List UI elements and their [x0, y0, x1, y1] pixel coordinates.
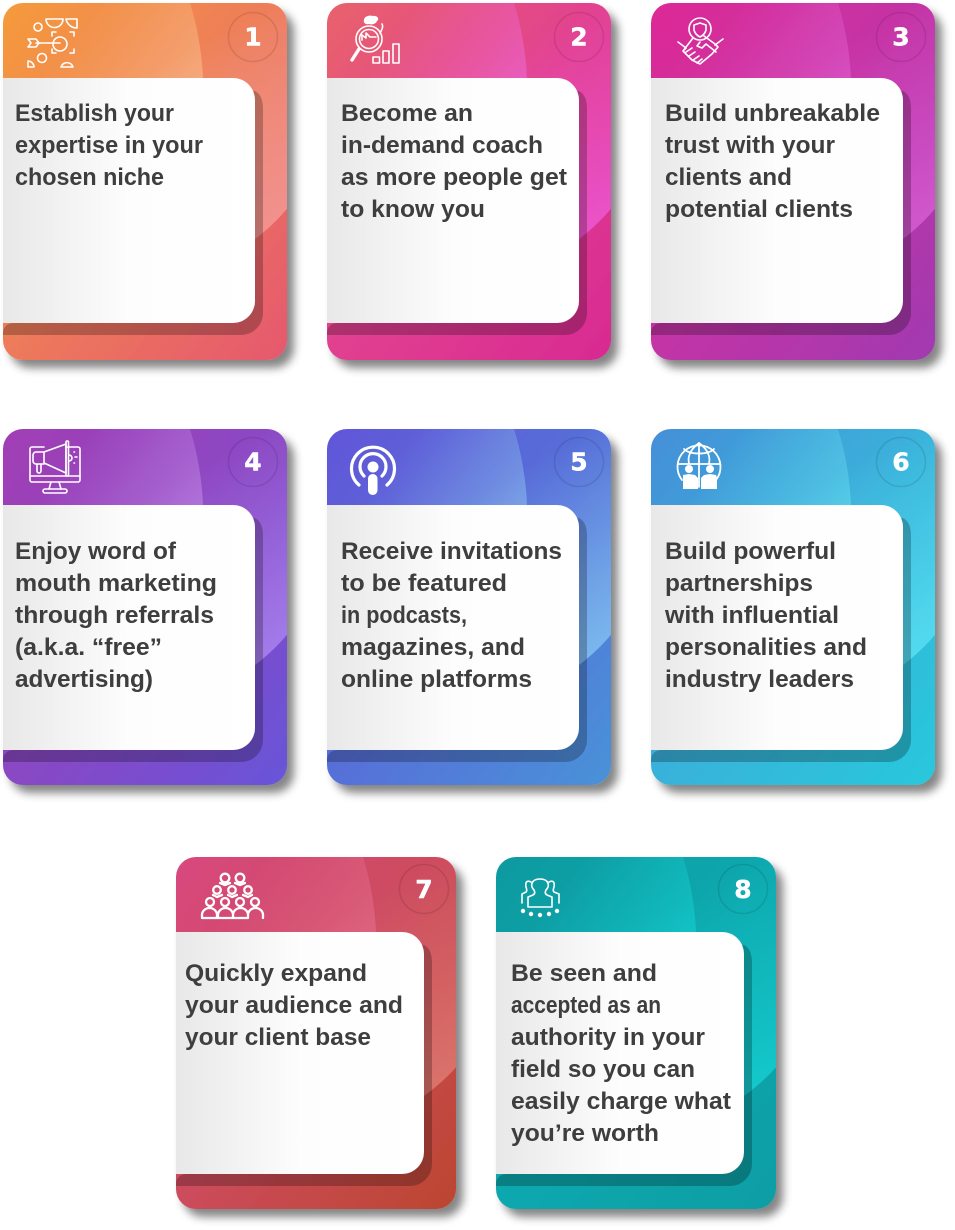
icon: handshake with shield: [678, 18, 723, 64]
card 7: audience: [176, 857, 470, 1224]
number badge 7: 7: [415, 875, 433, 904]
text: card 2: as more people get: [341, 164, 567, 191]
card 6: partnerships: [651, 429, 948, 800]
text: card 5: magazines, and: [341, 634, 525, 661]
icon: crowd of people: [202, 874, 263, 918]
text: card 4: advertising): [15, 666, 153, 693]
text: card 1: [15, 100, 203, 191]
text: card 5: in podcasts,: [341, 602, 467, 629]
text: card 4: mouth marketing: [15, 570, 217, 597]
text: card 7: [185, 960, 403, 1051]
text: card 6: personalities and: [665, 634, 867, 661]
text: card 3: [665, 100, 880, 223]
number badge 5: 5: [570, 448, 588, 476]
text: card 5: online platforms: [341, 666, 532, 693]
text: card 1: expertise in your: [15, 132, 203, 159]
text: card 4: (a.k.a. “free”: [15, 634, 162, 661]
number badge 1: 1: [244, 22, 262, 52]
text: card 6: Build powerful: [665, 538, 836, 565]
text: card 3: Build unbreakable: [665, 100, 880, 127]
card 4: word of mouth: [3, 429, 300, 800]
number badge 8: [718, 864, 768, 914]
text: card 6: [664, 538, 867, 693]
text: card 6: partnerships: [665, 570, 813, 597]
text: card 3: potential clients: [665, 196, 853, 223]
text: card 3: trust with your: [665, 132, 835, 159]
card 3: unbreakable trust: [651, 3, 948, 374]
text: card 2: [341, 100, 567, 223]
number badge 3: [876, 12, 926, 62]
card 5: invitations: [327, 429, 624, 800]
icon: podcast: [352, 447, 394, 495]
text: card 8: [511, 960, 731, 1147]
number badge 4: 4: [244, 448, 262, 476]
text: card 7: your audience and: [185, 992, 403, 1019]
text: card 7: Quickly expand: [185, 960, 367, 987]
icon: target with arrow: [28, 19, 77, 67]
number badge 2: 2: [570, 22, 588, 52]
card 8: authority: [496, 857, 790, 1224]
text: card 6: industry leaders: [665, 666, 854, 693]
number badge 1: [228, 12, 278, 62]
text: card 8: accepted as an: [511, 992, 661, 1019]
number badge 5: [554, 438, 604, 486]
card 1: establish expertise: [0, 0, 333, 360]
icon: megaphone on monitor: [30, 441, 80, 493]
text: card 8: field so you can: [511, 1056, 695, 1083]
number badge 3: 3: [892, 22, 910, 52]
text: card 3: clients and: [665, 164, 792, 191]
text: card 4: through referrals: [15, 602, 214, 629]
text: card 8: you’re worth: [511, 1120, 659, 1147]
text: card 4: Enjoy word of: [15, 538, 177, 565]
text: card 8: authority in your: [511, 1024, 705, 1051]
text: card 4: [15, 538, 217, 693]
icon: globe with two people: [678, 443, 720, 489]
number badge 6: [876, 438, 926, 486]
text: card 2: in-demand coach: [341, 132, 543, 159]
number badge 7: [400, 864, 448, 914]
number badge 2: [554, 12, 604, 62]
text: card 2: to know you: [341, 196, 485, 223]
text: card 1: Establish your: [15, 100, 174, 127]
text: card 5: to be featured: [341, 570, 507, 597]
text: card 7: your client base: [185, 1024, 371, 1051]
number badge 8: 8: [734, 875, 752, 904]
text: card 8: Be seen and: [511, 960, 657, 987]
text: card 8: easily charge what: [511, 1088, 731, 1115]
icon: people with five stars: [521, 879, 559, 917]
number badge 4: [228, 438, 278, 486]
card 2: in-demand coach: [327, 3, 624, 374]
text: card 6: with influential: [664, 602, 839, 629]
icon: magnifier and bar chart: [352, 16, 399, 63]
text: card 5: [341, 538, 562, 693]
text: card 1: chosen niche: [15, 164, 164, 191]
text: card 2: Become an: [341, 100, 473, 127]
number badge 6: 6: [892, 448, 910, 476]
text: card 5: Receive invitations: [341, 538, 562, 565]
